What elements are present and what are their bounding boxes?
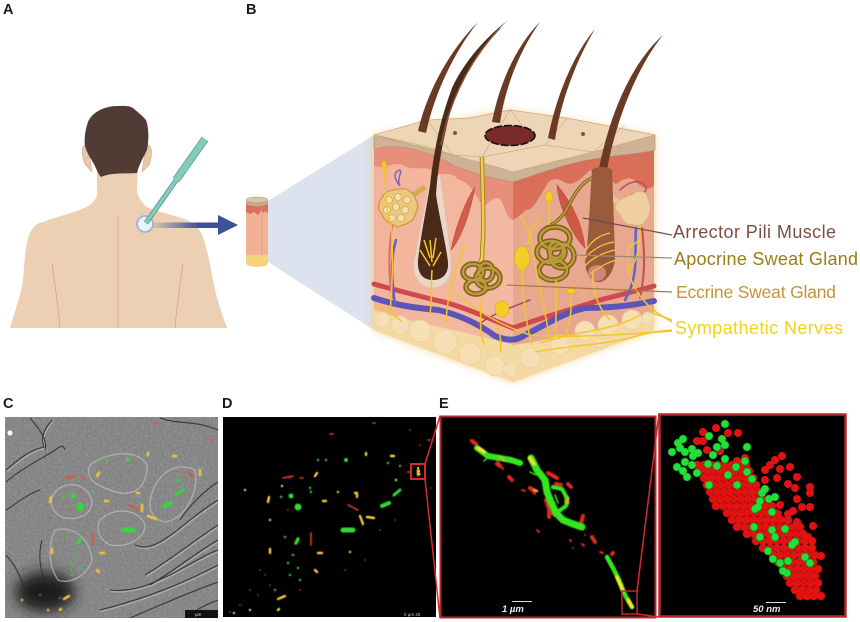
panel label E: E bbox=[439, 396, 449, 412]
dark tissue shadow bbox=[15, 572, 75, 612]
right follicle bbox=[585, 167, 617, 282]
panel label D: D bbox=[222, 396, 232, 412]
right sebaceous gland bbox=[608, 191, 650, 225]
zoom lines E left to E right bbox=[637, 414, 659, 617]
panel label B: B bbox=[246, 2, 256, 18]
left dermis face bbox=[374, 136, 513, 382]
scale bar: µm bbox=[195, 612, 202, 617]
panel D: fluorescence micrograph bbox=[223, 417, 436, 617]
outer glow bbox=[373, 110, 655, 382]
grain texture bbox=[5, 417, 218, 618]
label: Apocrine Sweat Gland: Apocrine Sweat Gland bbox=[674, 249, 858, 269]
top skin surface bbox=[374, 110, 655, 182]
yellow overlap signals bbox=[478, 448, 632, 607]
zoom box bbox=[411, 464, 425, 479]
ears bbox=[82, 145, 152, 172]
red localization dots: dense band bbox=[697, 465, 822, 596]
papillary dermis left bbox=[374, 136, 513, 220]
red localization dots: scattered bbox=[697, 428, 821, 556]
skin core sample cylinder bbox=[246, 197, 268, 267]
tissue fold highlights bbox=[7, 422, 219, 612]
panel A: person's back with biopsy bbox=[10, 106, 238, 328]
green signals bbox=[477, 448, 632, 607]
cell outlines bbox=[50, 454, 196, 581]
scale label 1 µm: 1 µm bbox=[502, 604, 524, 615]
blood vessels bbox=[374, 170, 654, 340]
label: Arrector Pili Muscle: Arrector Pili Muscle bbox=[673, 222, 836, 242]
panel C: overlay micrograph bbox=[5, 417, 219, 618]
arrector pili muscle right bbox=[557, 185, 585, 248]
hair highlight bbox=[441, 28, 500, 145]
white spot bbox=[8, 430, 12, 436]
yellow sensory corpuscles bbox=[382, 161, 576, 317]
zoom box bbox=[622, 591, 637, 614]
follicle sheath left bbox=[414, 175, 451, 288]
hairs bbox=[418, 22, 663, 170]
scale bar bbox=[185, 610, 218, 618]
biopsy punch tool bbox=[146, 139, 205, 223]
scale label 50 nm: 50 nm bbox=[753, 604, 781, 615]
green localization dots bbox=[672, 424, 810, 573]
scale label 1 µm bbox=[502, 602, 532, 615]
papillary dermis right bbox=[513, 136, 654, 220]
leader lines bbox=[507, 218, 672, 320]
right dermis face bbox=[513, 136, 654, 382]
arrector pili muscle left bbox=[451, 187, 475, 250]
panel E right: localization dot map bbox=[660, 414, 846, 616]
pore: biopsy mark bbox=[485, 126, 535, 146]
magnification cone bbox=[268, 135, 374, 330]
left sebaceous gland bbox=[379, 187, 425, 227]
arrow to skin sample bbox=[153, 215, 238, 235]
large hair and dark bulb bbox=[418, 20, 508, 280]
scale bar text: 0 µm 25 bbox=[404, 612, 421, 617]
hair bbox=[85, 106, 148, 177]
torso bbox=[10, 168, 227, 328]
panel label C: C bbox=[3, 396, 14, 412]
biopsy punch site bbox=[137, 216, 153, 232]
label: Sympathetic Nerves: Sympathetic Nerves bbox=[675, 318, 843, 338]
tissue folds bbox=[6, 418, 218, 618]
small pores bbox=[453, 131, 585, 136]
panel C: fluorescent signals bbox=[12, 423, 213, 612]
subcutaneous fat bbox=[374, 310, 654, 382]
red signals bbox=[472, 441, 613, 554]
panel B: skin cross-section block bbox=[373, 20, 672, 382]
zoom lines D to E bbox=[425, 416, 440, 618]
eccrine sweat gland with duct bbox=[463, 157, 500, 294]
label: Eccrine Sweat Gland: Eccrine Sweat Gland bbox=[676, 282, 836, 302]
apocrine sweat gland with duct bbox=[537, 178, 592, 280]
panel label A: A bbox=[3, 2, 14, 18]
fluorescent signals bbox=[230, 423, 431, 613]
panel E left: super-resolution overview bbox=[440, 416, 656, 618]
spine and arm creases bbox=[52, 217, 183, 328]
sympathetic nerve fibres bbox=[374, 165, 672, 352]
bright detail in zoom box bbox=[418, 467, 420, 476]
